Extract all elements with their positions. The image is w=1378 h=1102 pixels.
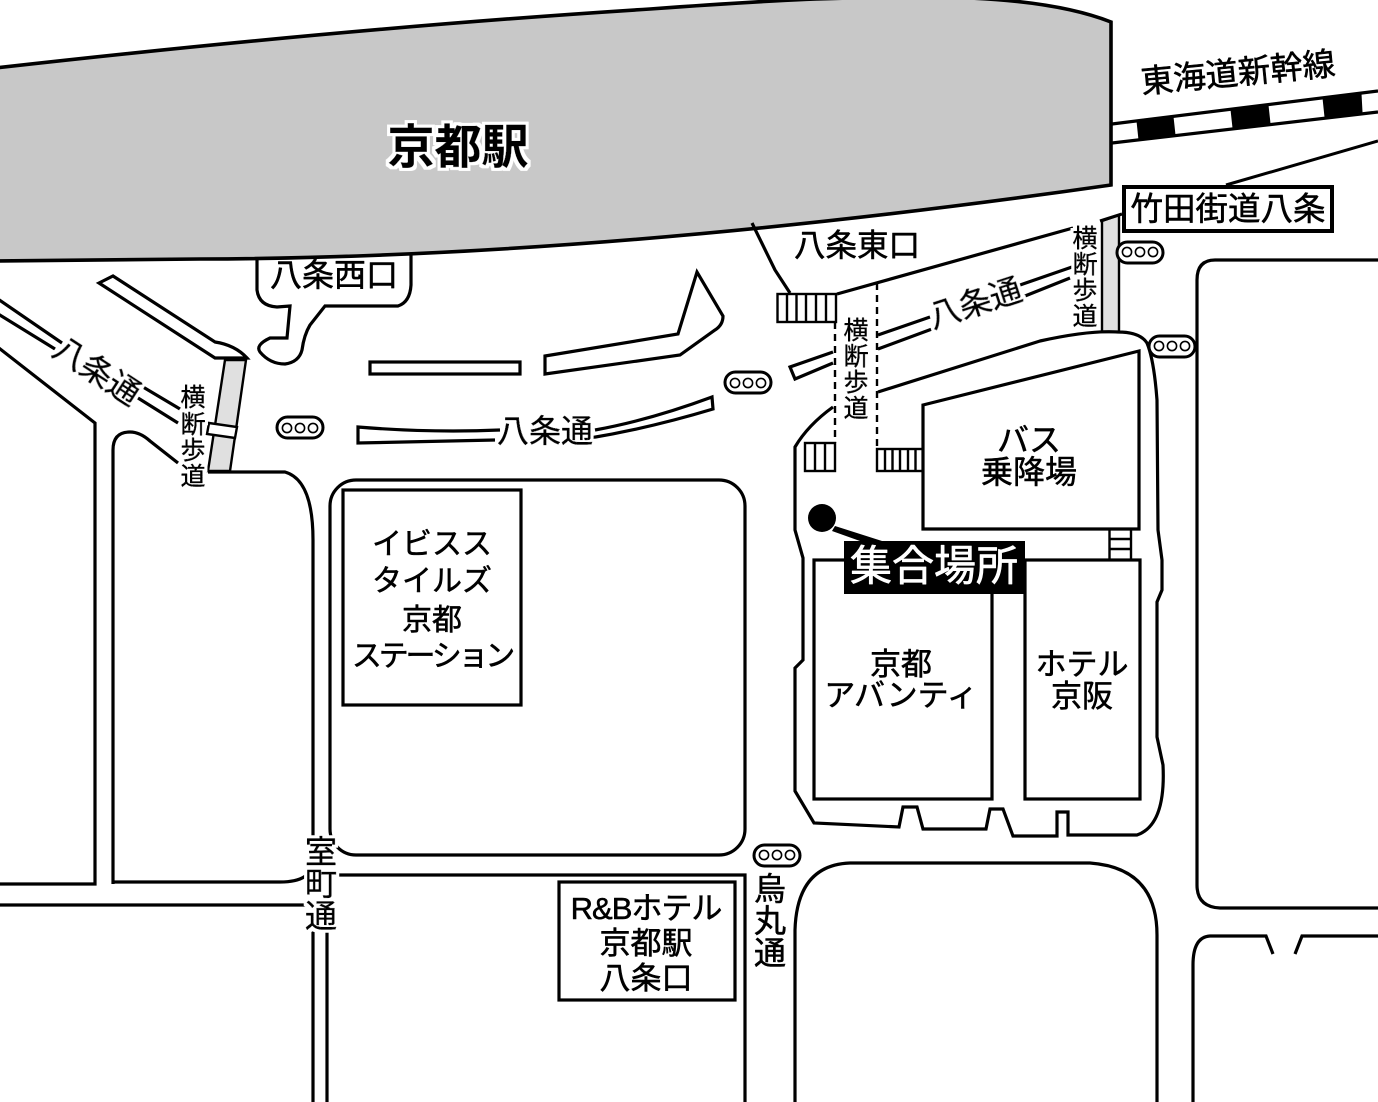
label: pedestrian crossing center: 断 — [843, 343, 869, 371]
road edges south-west — [0, 875, 745, 1102]
label: Ibis Styles Kyoto Station: タイルズ — [372, 564, 492, 598]
label: Tokaido Shinkansen: 東海道新幹線 — [1139, 46, 1337, 100]
station block outline east — [795, 332, 1163, 836]
label: Hotel Keihan: ホテル — [1036, 646, 1128, 682]
Ibis Styles Kyoto Station building — [343, 490, 521, 705]
label: Muromachi-dori: 通 — [305, 898, 337, 934]
label: Ibis Styles Kyoto Station: ステーション — [352, 640, 513, 672]
crosswalk stripes: left of bus terminal — [805, 443, 835, 471]
traffic signal icon 1 — [277, 417, 323, 438]
Hotel Keihan building — [1025, 560, 1140, 799]
meeting point label: 集合場所 — [850, 542, 1018, 590]
label: pedestrian crossing west: 道 — [180, 463, 206, 491]
crosswalk stripes: east exit — [778, 294, 836, 322]
central medians — [358, 272, 723, 443]
label: Hachijo-dori east: 八条通 — [924, 271, 1026, 335]
label: pedestrian crossing center: 道 — [843, 395, 869, 423]
label: Karasuma-dori: 丸 — [754, 903, 786, 939]
bus terminal building — [923, 351, 1139, 529]
east exit road edges — [752, 214, 1122, 294]
west Hachijo-dori median lines — [0, 297, 180, 423]
label: R&B Hotel: R&Bホテル — [571, 890, 721, 926]
label: Bus terminal: バス — [997, 422, 1061, 458]
label: R&B Hotel: 京都駅 — [600, 926, 692, 960]
label: Hachijo East Exit: 八条東口 — [794, 227, 920, 263]
label: pedestrian crossing west: 歩 — [180, 437, 206, 465]
traffic signal icon 3 — [1117, 242, 1163, 263]
R&B Hotel building — [559, 882, 735, 1000]
stairs below bus terminal — [1110, 529, 1131, 560]
label: Hotel Keihan: 京阪 — [1051, 678, 1113, 714]
label: pedestrian crossing east: 歩 — [1072, 277, 1098, 305]
label: pedestrian crossing west: 断 — [180, 411, 206, 439]
west median island — [99, 276, 247, 358]
Ibis block — [330, 480, 745, 855]
Kyoto Station building — [0, 0, 1111, 261]
dashed crossing lines — [835, 283, 877, 449]
label: Kyoto Station: 京都駅 — [388, 120, 528, 174]
label: Ibis Styles Kyoto Station: イビスス — [372, 528, 492, 560]
east block — [1197, 260, 1378, 908]
far-left block — [0, 345, 95, 884]
gray crosswalk west — [207, 360, 246, 471]
traffic signal icon 4 — [1149, 336, 1195, 357]
crosswalk stripes: front of bus terminal — [877, 449, 923, 471]
label: pedestrian crossing west: 横 — [180, 384, 206, 412]
Kyoto Avanti building — [814, 560, 992, 799]
south-east block — [1193, 936, 1378, 1102]
label: Muromachi-dori: 町 — [305, 866, 337, 902]
label: Ibis Styles Kyoto Station: 京都 — [402, 604, 462, 636]
label: pedestrian crossing east: 横 — [1072, 225, 1098, 253]
label: pedestrian crossing center: 歩 — [843, 369, 869, 397]
traffic signal icon 5 — [754, 845, 800, 866]
label: pedestrian crossing center: 横 — [843, 317, 869, 345]
gray crosswalk east — [1102, 215, 1119, 332]
label: Karasuma-dori: 通 — [754, 935, 786, 971]
label: pedestrian crossing east: 断 — [1072, 251, 1098, 279]
label: Bus terminal: 乗降場 — [981, 454, 1077, 490]
traffic signal icon 2 — [725, 372, 771, 393]
label: Hachijo West Exit: 八条西口 — [270, 257, 398, 293]
Hachijo-dori median east — [790, 267, 1072, 379]
label: Karasuma-dori: 烏 — [754, 871, 786, 907]
label: Hachijo-dori center: 八条通 — [497, 413, 593, 449]
label: R&B Hotel: 八条口 — [600, 960, 692, 996]
west exit plaza bubble — [257, 249, 411, 364]
south-central block — [795, 863, 1157, 1102]
Tokaido Shinkansen track — [1112, 91, 1378, 143]
label: pedestrian crossing east: 道 — [1072, 303, 1098, 331]
label: Hachijo-dori west: 八条通 — [47, 330, 147, 412]
Takeda Kaido road line — [1226, 141, 1378, 185]
label: Muromachi-dori: 室 — [305, 834, 337, 870]
label: Kyoto Avanti: アバンティ — [824, 678, 978, 712]
label: Kyoto Avanti: 京都 — [870, 646, 932, 682]
label: Takeda Kaido Hachijo: 竹田街道八条 — [1130, 191, 1326, 227]
block west of Ibis — [113, 432, 313, 884]
meeting point marker — [808, 504, 882, 541]
